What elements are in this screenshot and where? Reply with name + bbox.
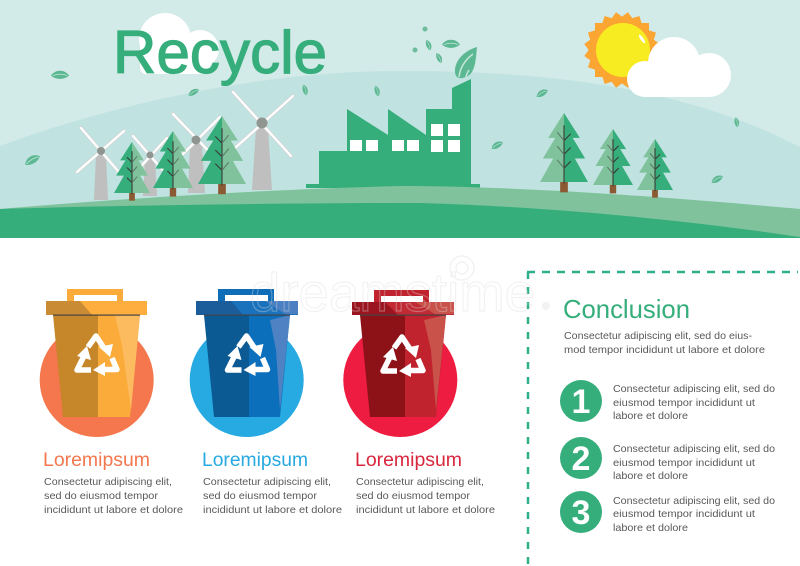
item 1: eiusmod tempor incididunt ut — [613, 397, 755, 409]
bin: orange — [40, 289, 154, 437]
item 3: Consectetur adipiscing elit, sed do — [613, 495, 775, 507]
heading: red column: Loremipsum — [355, 450, 462, 471]
item 1: Consectetur adipiscing elit, sed do — [613, 383, 775, 395]
text: blue column — [203, 476, 342, 516]
conclusion intro: Consectetur adipiscing elit, sed do eius- — [564, 330, 753, 342]
heading: blue column: Loremipsum — [202, 450, 308, 471]
text: blue column: incididunt ut labore et dolore — [203, 504, 342, 516]
mid hill — [0, 186, 800, 238]
text: red column: Consectetur adipiscing elit, — [356, 476, 484, 488]
text: orange column: sed do eiusmod tempor — [44, 490, 159, 502]
cloud behind title — [139, 13, 219, 74]
windmill 4 — [233, 92, 293, 190]
item 2: labore et dolore — [613, 470, 688, 482]
watermark: dreamstime — [250, 263, 535, 323]
conclusion intro: mod tempor incididunt ut labore et dolore — [564, 344, 765, 356]
title: Recycle — [113, 19, 327, 86]
windmill 3 — [172, 114, 222, 193]
panel: conclusion — [527, 272, 798, 566]
text: orange column: incididunt ut labore et dolore — [44, 504, 183, 516]
item 1 — [560, 380, 775, 422]
item 3: 3 — [572, 494, 590, 532]
text: red column: sed do eiusmod tempor — [356, 490, 471, 502]
item 2: eiusmod tempor incididunt ut — [613, 457, 755, 469]
item 1: 1 — [572, 383, 590, 421]
item 1: labore et dolore — [613, 410, 688, 422]
item 2: Consectetur adipiscing elit, sed do — [613, 443, 775, 455]
icon: factory leaf — [455, 47, 477, 78]
text: orange column: Consectetur adipiscing elit, — [44, 476, 172, 488]
cloud right — [627, 37, 731, 97]
item 3 — [560, 491, 775, 534]
conclusion intro — [564, 330, 765, 356]
factory — [306, 79, 480, 188]
bin: red — [343, 290, 457, 437]
panel: landscape scene — [0, 0, 800, 238]
item 3: eiusmod tempor incididunt ut — [613, 508, 755, 520]
text: red column — [356, 476, 495, 516]
background hill — [0, 71, 800, 238]
floating leaves — [23, 26, 740, 185]
front hill — [0, 203, 800, 238]
item 3: labore et dolore — [613, 522, 688, 534]
conclusion heading: Conclusion — [563, 294, 690, 324]
bin: blue — [190, 289, 304, 437]
text: orange column — [44, 476, 183, 516]
text: blue column: sed do eiusmod tempor — [203, 490, 318, 502]
windmill 1 — [77, 128, 124, 200]
text: blue column: Consectetur adipiscing elit, — [203, 476, 331, 488]
item 2: 2 — [572, 440, 590, 478]
heading: orange column: Loremipsum — [43, 450, 150, 471]
text: red column: incididunt ut labore et dolore — [356, 504, 495, 516]
item 2 — [560, 437, 775, 482]
trees left — [114, 116, 246, 201]
windmill 2 — [133, 136, 167, 196]
trees right — [540, 113, 673, 198]
icon: sun — [584, 12, 660, 88]
